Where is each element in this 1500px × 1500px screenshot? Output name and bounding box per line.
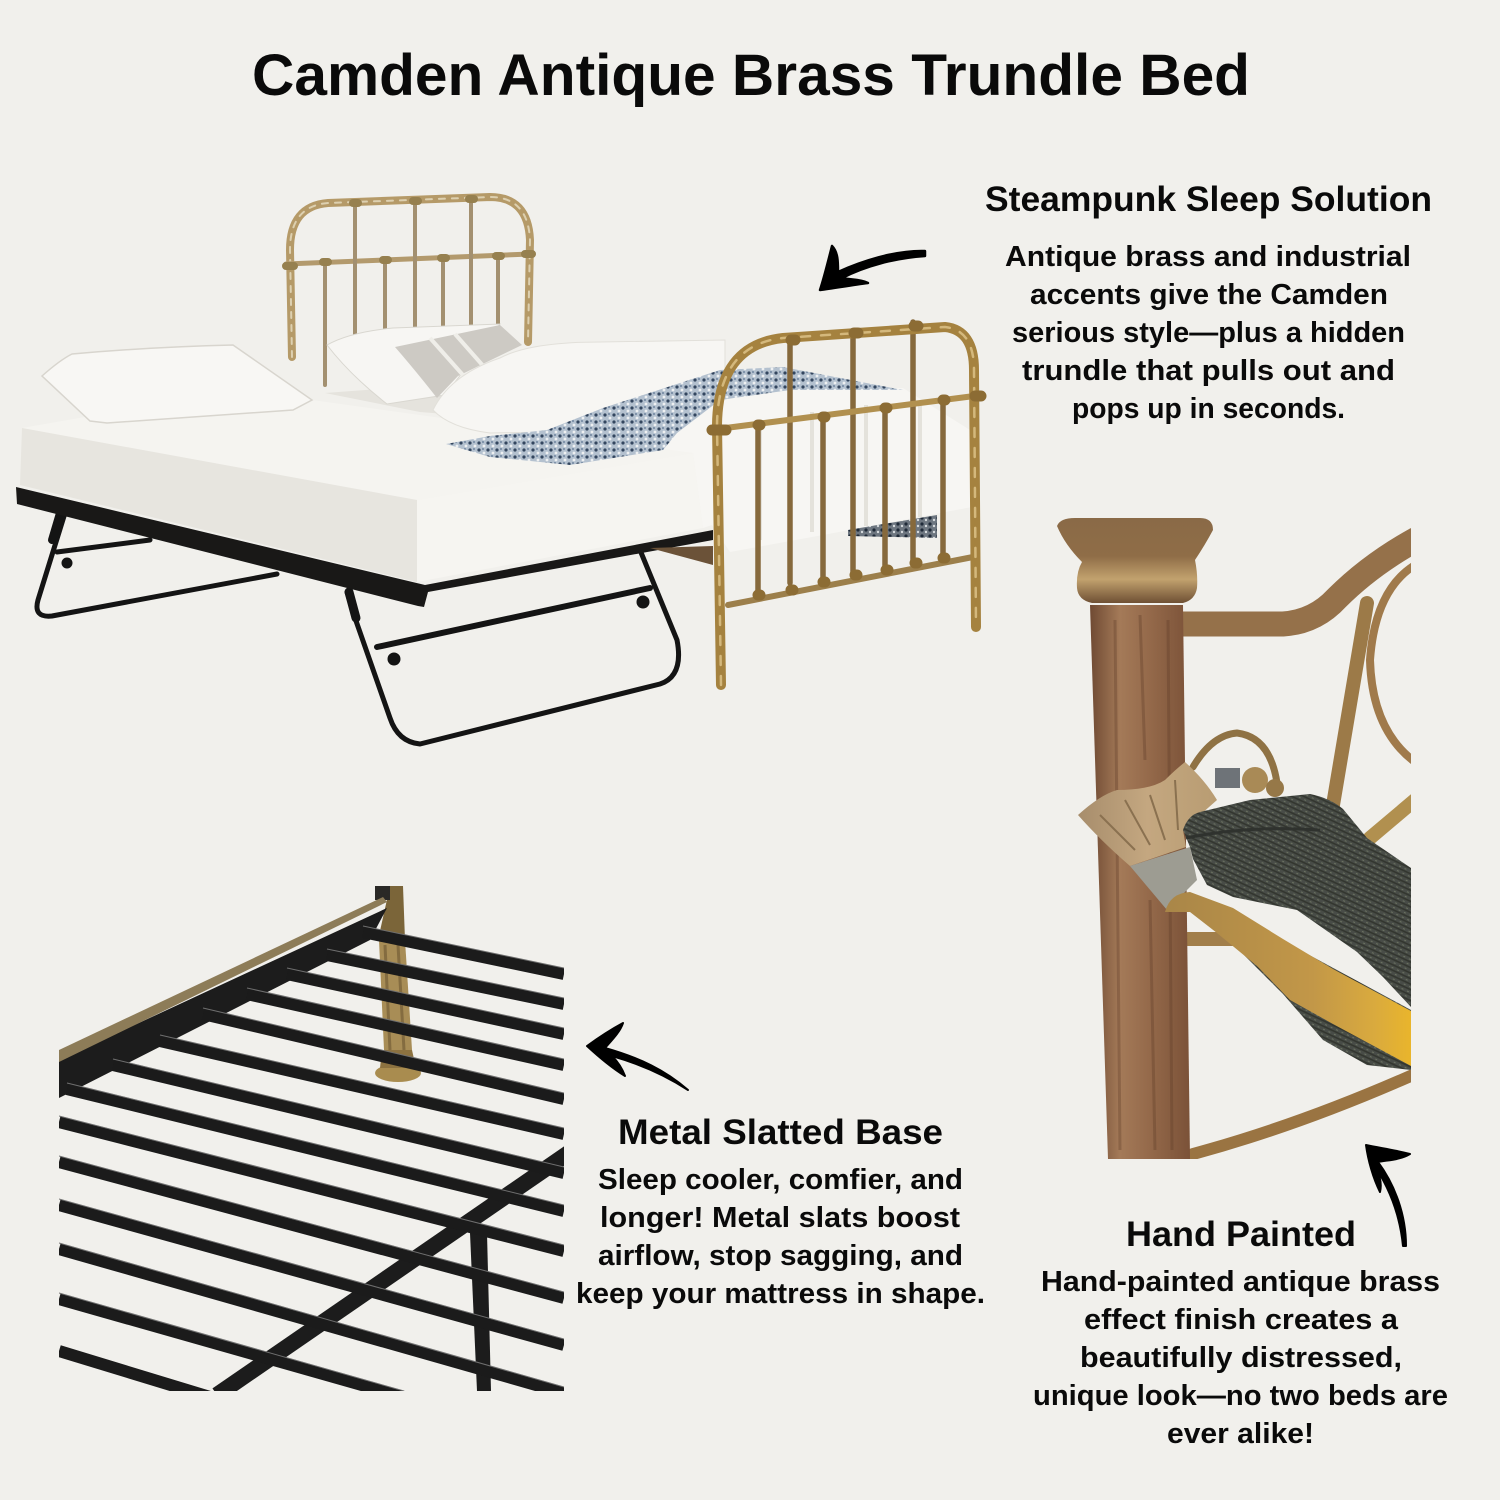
centre support bar [217,1152,570,1395]
body text: airflow, stop sagging, and [598,1240,963,1272]
body text: Antique brass and industrial [1005,241,1411,273]
blanket [446,367,903,465]
side rail [59,908,387,1098]
callout: Hand Painted [1033,1215,1448,1450]
post cap [1057,518,1213,603]
body text: pops up in seconds. [1072,393,1345,425]
heading: Metal Slatted Base [618,1113,943,1152]
glove [1183,794,1411,1007]
body text: Sleep cooler, comfier, and [598,1164,963,1196]
knobs behind brush [1215,767,1284,797]
body text: unique look—no two beds are [1033,1380,1448,1412]
arrow: to painting photo [1366,1145,1410,1246]
paint brush [1078,762,1411,1066]
support leg [470,1233,491,1391]
photo: trundle bed [16,197,982,744]
brass post [375,886,421,1082]
arrow: to slatted base [587,1023,688,1090]
photo: hand painting the post [1057,518,1415,1159]
slats [59,932,564,1397]
slat highlights [59,926,564,1391]
duvet [433,340,725,433]
body text: Hand-painted antique brass [1041,1266,1440,1298]
body text: effect finish creates a [1084,1304,1399,1336]
callout: Metal Slatted Base [576,1113,985,1310]
post [1090,605,1190,1159]
body text: longer! Metal slats boost [600,1202,960,1234]
trundle frame [16,487,713,607]
body text: beautifully distressed, [1080,1342,1402,1374]
sleeve [1244,955,1411,1070]
body text: keep your mattress in shape. [576,1278,985,1310]
body text [1005,241,1411,425]
upper bed behind trundle [325,380,972,552]
body text: trundle that pulls out and [1022,355,1395,387]
trundle mattress [20,400,703,582]
body text [576,1164,985,1310]
callout: Steampunk Sleep Solution [985,180,1432,425]
body text: accents give the Camden [1030,279,1388,311]
back pillows [327,324,522,404]
heading: Steampunk Sleep Solution [985,180,1432,219]
trundle legs [37,513,679,744]
title: Camden Antique Brass Trundle Bed [252,43,1250,108]
arrow: to bed [820,246,925,290]
body text: ever alike! [1167,1418,1314,1450]
scroll ironwork [1183,540,1415,1154]
body text: serious style—plus a hidden [1012,317,1405,349]
photo: metal slatted base [59,886,570,1397]
far headboard [286,197,532,385]
heading: Hand Painted [1126,1215,1356,1254]
footboard [710,322,982,685]
body text [1033,1266,1448,1450]
front pillow [42,345,312,423]
